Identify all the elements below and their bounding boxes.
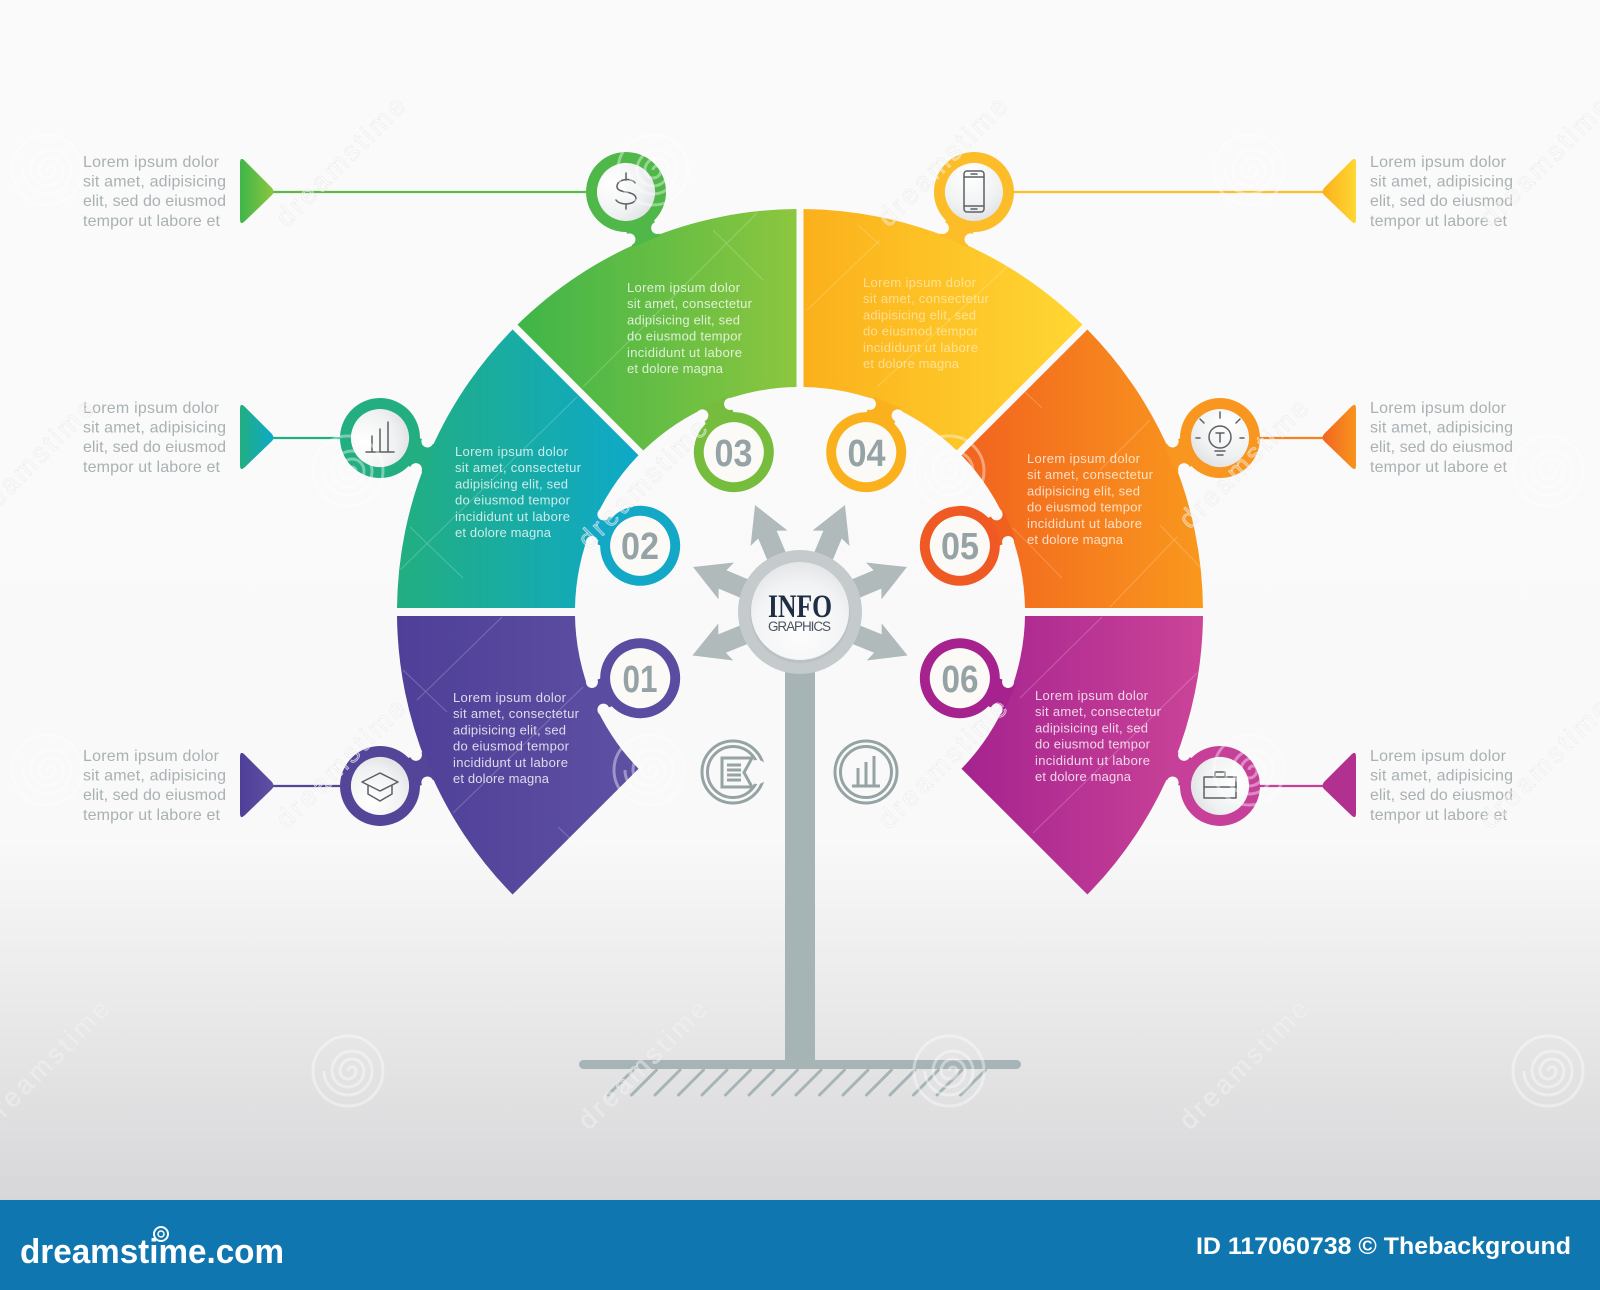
- hub label: GRAPHICS: [768, 619, 831, 634]
- segment text 02: incididunt ut labore: [455, 509, 570, 524]
- side text: top right: tempor ut labore et: [1370, 213, 1508, 230]
- side text: top right: [1370, 154, 1513, 230]
- segment text 01: do eiusmod tempor: [453, 739, 570, 754]
- side text: bottom left: Lorem ipsum dolor: [83, 748, 220, 765]
- side text: top left: tempor ut labore et: [83, 213, 221, 230]
- number tab 05: [914, 493, 1023, 592]
- segment 5: orange: [962, 330, 1203, 608]
- segment text 03: do eiusmod tempor: [627, 329, 743, 344]
- segment text 05: do eiusmod tempor: [1027, 500, 1143, 515]
- number tab 03: [681, 389, 780, 498]
- segment text 04: do eiusmod tempor: [863, 324, 979, 339]
- segment text 06: Lorem ipsum dolor: [1035, 688, 1149, 703]
- segment 3: green: [518, 209, 796, 450]
- hub circle: [738, 550, 862, 674]
- watermark text: dreamstime: [872, 693, 1013, 834]
- segment text 05: et dolore magna: [1027, 532, 1124, 547]
- side text: top right: elit, sed do eiusmod: [1370, 193, 1513, 210]
- hub label: [768, 589, 832, 634]
- segment text 04: et dolore magna: [863, 356, 960, 371]
- tree stem: [785, 660, 815, 1065]
- segment text 02: [455, 444, 582, 540]
- arrow marker orange: [1322, 405, 1356, 469]
- arrow marker purple: [240, 753, 274, 817]
- segment text 06: incididunt ut labore: [1035, 753, 1150, 768]
- side text: middle left: sit amet, adipisicing: [83, 420, 226, 437]
- icon: bulb: [1196, 412, 1244, 455]
- icon tab orange: [1157, 393, 1265, 490]
- hub arrows: [685, 497, 915, 674]
- side text: middle right: [1370, 400, 1513, 476]
- arrow marker teal: [240, 405, 274, 469]
- segment text 05: sit amet, consectetur: [1027, 467, 1154, 482]
- watermark text: dreamstime: [1173, 393, 1314, 534]
- side text: top right: Lorem ipsum dolor: [1370, 154, 1507, 171]
- icon: dollar: [616, 173, 636, 209]
- numbers: 03: [714, 433, 752, 475]
- side text: middle right: elit, sed do eiusmod: [1370, 439, 1513, 456]
- side text: top left: elit, sed do eiusmod: [83, 193, 226, 210]
- footer bar: [0, 1200, 1600, 1290]
- segment text 04: [863, 275, 990, 371]
- numbers: 01: [622, 659, 658, 701]
- segment text 03: incididunt ut labore: [627, 345, 742, 360]
- segment text 06: do eiusmod tempor: [1035, 737, 1151, 752]
- segment text 05: adipisicing elit, sed: [1027, 483, 1140, 498]
- segment text 03: sit amet, consectetur: [627, 296, 753, 311]
- number tab 01: [577, 632, 686, 731]
- watermark text: dreamstime: [1173, 994, 1314, 1135]
- icon tab magenta: [1157, 734, 1265, 831]
- segment text 05: [1027, 451, 1154, 547]
- watermark text: dreamstime: [572, 413, 713, 554]
- segment text 02: Lorem ipsum dolor: [455, 444, 569, 459]
- side text: middle right: tempor ut labore et: [1370, 459, 1508, 476]
- icon tab teal: [335, 393, 443, 490]
- segment text 02: et dolore magna: [455, 525, 552, 540]
- segment text 04: Lorem ipsum dolor: [863, 275, 977, 290]
- icon: bars teal: [366, 422, 394, 452]
- segment text 01: Lorem ipsum dolor: [453, 690, 567, 705]
- icon tab yellow: [922, 147, 1019, 255]
- segment 4: yellow: [804, 209, 1082, 450]
- number tab 02: [577, 493, 686, 592]
- segment text 01: [453, 690, 580, 786]
- watermark spirals: [12, 135, 1583, 1106]
- numbers: 02: [621, 526, 659, 568]
- segment text 04: sit amet, consectetur: [863, 291, 990, 306]
- numbers: 06: [942, 659, 978, 701]
- left connector lines: [273, 192, 592, 786]
- side text: bottom right: sit amet, adipisicing: [1370, 768, 1513, 785]
- segment text 02: do eiusmod tempor: [455, 493, 571, 508]
- side text: middle left: [83, 400, 226, 476]
- side text: middle left: tempor ut labore et: [83, 459, 221, 476]
- side text: middle right: Lorem ipsum dolor: [1370, 400, 1507, 417]
- numbers: 05: [941, 526, 979, 568]
- side text: middle left: elit, sed do eiusmod: [83, 439, 226, 456]
- side text: middle right: sit amet, adipisicing: [1370, 420, 1513, 437]
- arrow marker green: [240, 159, 274, 223]
- segment text 04: adipisicing elit, sed: [863, 307, 976, 322]
- ground line: [579, 1060, 1021, 1069]
- segment 6: magenta: [962, 616, 1203, 894]
- icon tab green: [581, 147, 678, 255]
- ground hatching: [608, 1070, 986, 1095]
- side text: top left: Lorem ipsum dolor: [83, 154, 220, 171]
- side text: bottom right: Lorem ipsum dolor: [1370, 748, 1507, 765]
- number tab 06: [914, 632, 1023, 731]
- segment 2: teal: [397, 330, 638, 608]
- segment text 06: et dolore magna: [1035, 769, 1132, 784]
- segment text 06: adipisicing elit, sed: [1035, 720, 1148, 735]
- watermark text: dreamstime: [872, 91, 1013, 232]
- side text: bottom right: [1370, 748, 1513, 824]
- side text: middle left: Lorem ipsum dolor: [83, 400, 220, 417]
- segment text 01: incididunt ut labore: [453, 755, 568, 770]
- small icon: document: [702, 741, 769, 803]
- segment text 05: Lorem ipsum dolor: [1027, 451, 1141, 466]
- arrow marker yellow: [1322, 159, 1356, 223]
- segment text 01: et dolore magna: [453, 771, 550, 786]
- segment text 03: et dolore magna: [627, 361, 724, 376]
- right connector lines: [1008, 192, 1323, 786]
- segment text 01: adipisicing elit, sed: [453, 722, 566, 737]
- icon: briefcase: [1204, 772, 1236, 798]
- watermark text: dreamstime: [270, 693, 411, 834]
- segment text 04: incididunt ut labore: [863, 340, 978, 355]
- watermark text: dreamstime: [270, 91, 411, 232]
- segment text 01: sit amet, consectetur: [453, 706, 580, 721]
- numbers: 04: [848, 433, 886, 475]
- segment text 03: Lorem ipsum dolor: [627, 280, 741, 295]
- icon: graduation cap: [362, 773, 398, 801]
- segment text 03: adipisicing elit, sed: [627, 312, 740, 327]
- side text: bottom left: tempor ut labore et: [83, 807, 221, 824]
- side text: top left: [83, 154, 226, 230]
- segment 1: purple: [397, 616, 638, 894]
- number tab 04: [820, 389, 919, 498]
- segment text 02: adipisicing elit, sed: [455, 476, 568, 491]
- footer logo: dreamstime.com: [20, 1233, 284, 1271]
- icon: phone: [964, 171, 984, 212]
- side text: bottom left: elit, sed do eiusmod: [83, 787, 226, 804]
- segment text 05: incididunt ut labore: [1027, 516, 1142, 531]
- footer credit: ID 117060738 © Thebackground: [1196, 1233, 1571, 1260]
- numbers: [621, 433, 979, 701]
- icon tab purple: [335, 734, 443, 831]
- segment text 02: sit amet, consectetur: [455, 460, 582, 475]
- side text: bottom left: sit amet, adipisicing: [83, 768, 226, 785]
- segment text 06: sit amet, consectetur: [1035, 704, 1162, 719]
- hub label: INFO: [768, 589, 832, 625]
- side text: bottom right: tempor ut labore et: [1370, 807, 1508, 824]
- arrow marker magenta: [1322, 753, 1356, 817]
- small icon: bar chart: [835, 741, 897, 803]
- side text: bottom left: [83, 748, 226, 824]
- segment text 06: [1035, 688, 1162, 784]
- side text: top left: sit amet, adipisicing: [83, 174, 226, 191]
- segment text 03: [627, 280, 753, 376]
- side text: bottom right: elit, sed do eiusmod: [1370, 787, 1513, 804]
- side text: top right: sit amet, adipisicing: [1370, 174, 1513, 191]
- watermark text: dreamstime: [572, 994, 713, 1135]
